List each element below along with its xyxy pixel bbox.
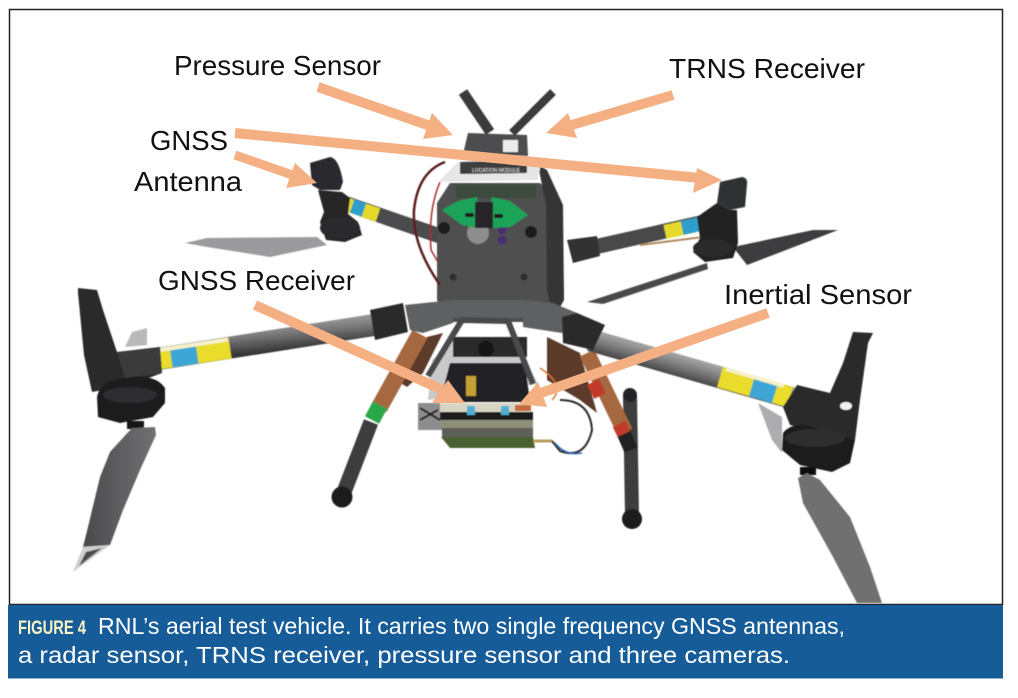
caption line 2: a radar sensor, TRNS receiver, pressure sensor and three cameras. xyxy=(18,642,790,668)
caption line 1: RNL’s aerial test vehicle. It carries two single frequency GNSS antennas, xyxy=(98,613,845,639)
arrow: GNSS antenna right xyxy=(235,133,722,193)
rear left propeller xyxy=(185,237,327,257)
camera lens xyxy=(467,222,489,244)
arrow: pressure sensor xyxy=(318,87,453,139)
label: inertial sensor: Inertial Sensor xyxy=(724,279,912,310)
right landing leg xyxy=(587,353,642,529)
front right motor xyxy=(782,332,873,475)
rear left arm xyxy=(347,204,440,236)
front right propeller blade xyxy=(798,473,882,603)
caption bar xyxy=(8,605,1003,678)
brown panel right xyxy=(547,337,597,413)
drone photograph xyxy=(73,92,882,603)
lower hub xyxy=(370,300,605,350)
arrow: GNSS antenna left xyxy=(235,155,317,188)
label: GNSS antenna: GNSS xyxy=(150,125,228,156)
label: GNSS receiver: GNSS Receiver xyxy=(158,265,355,296)
label: pressure sensor: Pressure Sensor xyxy=(174,50,381,81)
rear right motor and antenna xyxy=(693,177,747,262)
location module: LOCATION MODULE xyxy=(472,168,521,174)
front right rear blade xyxy=(758,403,782,453)
radio antennas xyxy=(463,92,553,133)
caption figure number: FIGURE 4 xyxy=(18,618,86,639)
arrow: inertial sensor xyxy=(519,313,768,407)
label: GNSS antenna xyxy=(134,125,242,197)
arrow: TRNS receiver xyxy=(546,95,673,138)
purple sensors xyxy=(498,226,506,244)
front left propeller blade xyxy=(73,427,156,572)
front right arm xyxy=(590,340,792,398)
rear right arm xyxy=(567,221,714,263)
arrow: GNSS receiver xyxy=(255,305,465,403)
front left arm xyxy=(158,324,380,359)
rear right propeller xyxy=(587,230,838,304)
mounting plate xyxy=(438,158,542,182)
red and black wires xyxy=(414,162,445,285)
centre body xyxy=(437,165,564,322)
left landing leg xyxy=(332,334,420,508)
label: GNSS antenna: Antenna xyxy=(134,166,242,197)
label: TRNS receiver: TRNS Receiver xyxy=(669,53,865,84)
front left motor xyxy=(78,288,165,429)
payload cables xyxy=(533,400,592,454)
location module xyxy=(460,133,528,174)
payload frame xyxy=(428,320,557,402)
brown panel left xyxy=(396,333,443,387)
rear left motor and antenna xyxy=(310,157,362,242)
green circuit board xyxy=(442,197,528,228)
payload circuit stack xyxy=(418,403,535,448)
